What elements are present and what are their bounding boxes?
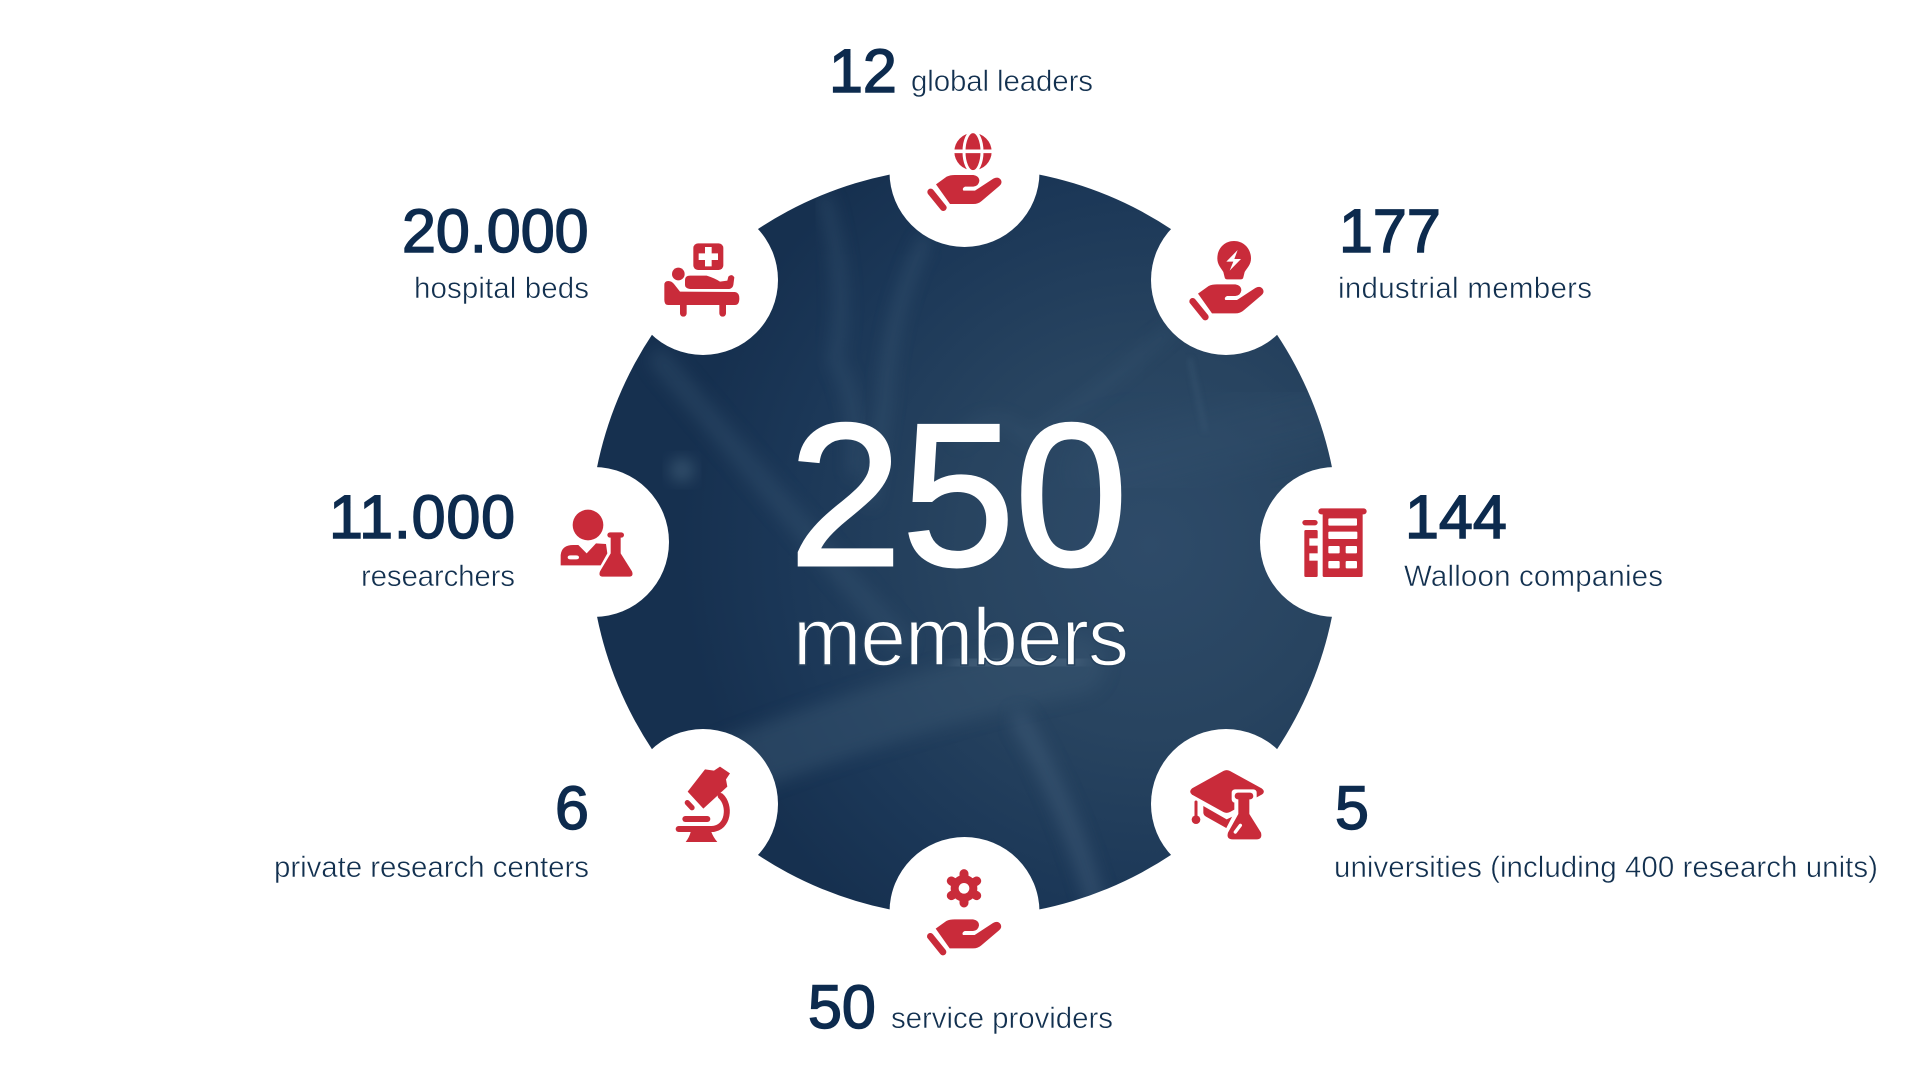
stat: 50 service providers — [808, 973, 1113, 1041]
icon: graduation cap and flask — [1190, 770, 1264, 839]
stat: 20.000 hospital beds — [402, 197, 589, 305]
stat: 6 private research centers: 6 — [555, 774, 589, 842]
icon: building — [1302, 508, 1367, 577]
panel: central disc — [590, 167, 1340, 917]
stat: 177 industrial members — [1338, 197, 1592, 305]
stat: 5 universities: universities (including 400 research units) — [1334, 851, 1878, 884]
stat: 6 private research centers — [274, 774, 589, 884]
stat: 50 service providers: service providers — [891, 1002, 1113, 1035]
stat: 144 Walloon companies: 144 — [1405, 483, 1507, 551]
icon: hand holding gear — [930, 874, 1001, 952]
central number: 250 — [789, 382, 1128, 609]
stat: 12 global leaders: 12 — [829, 37, 897, 105]
icon: hospital bed — [664, 243, 739, 313]
stat: 177 industrial members: industrial members — [1338, 272, 1592, 305]
stat: 144 Walloon companies: Walloon companies — [1404, 560, 1663, 593]
central label: members — [793, 592, 1129, 683]
notch circles — [519, 97, 1410, 987]
stat: 12 global leaders: global leaders — [911, 65, 1093, 98]
icon: hand holding light bulb — [1193, 241, 1264, 317]
icon: microscope — [679, 767, 730, 842]
stat: 20.000 hospital beds: 20.000 — [402, 197, 589, 265]
stat: 11.000 researchers: researchers — [361, 560, 515, 593]
stat: 20.000 hospital beds: hospital beds — [414, 272, 589, 305]
stat: 5 universities: 5 — [1335, 774, 1369, 842]
stat: 144 Walloon companies — [1404, 483, 1663, 593]
icon: researcher with flask — [561, 510, 633, 577]
stat: 5 universities — [1334, 774, 1878, 884]
stat: 50 service providers: 50 — [808, 973, 876, 1041]
stat: 12 global leaders — [829, 37, 1093, 105]
stat: 11.000 researchers: 11.000 — [329, 483, 515, 551]
stat: 11.000 researchers — [329, 483, 515, 593]
stat: 177 industrial members: 177 — [1339, 197, 1441, 265]
stat: 6 private research centers: private research centers — [274, 851, 589, 884]
icon: hand holding globe — [931, 132, 1002, 208]
